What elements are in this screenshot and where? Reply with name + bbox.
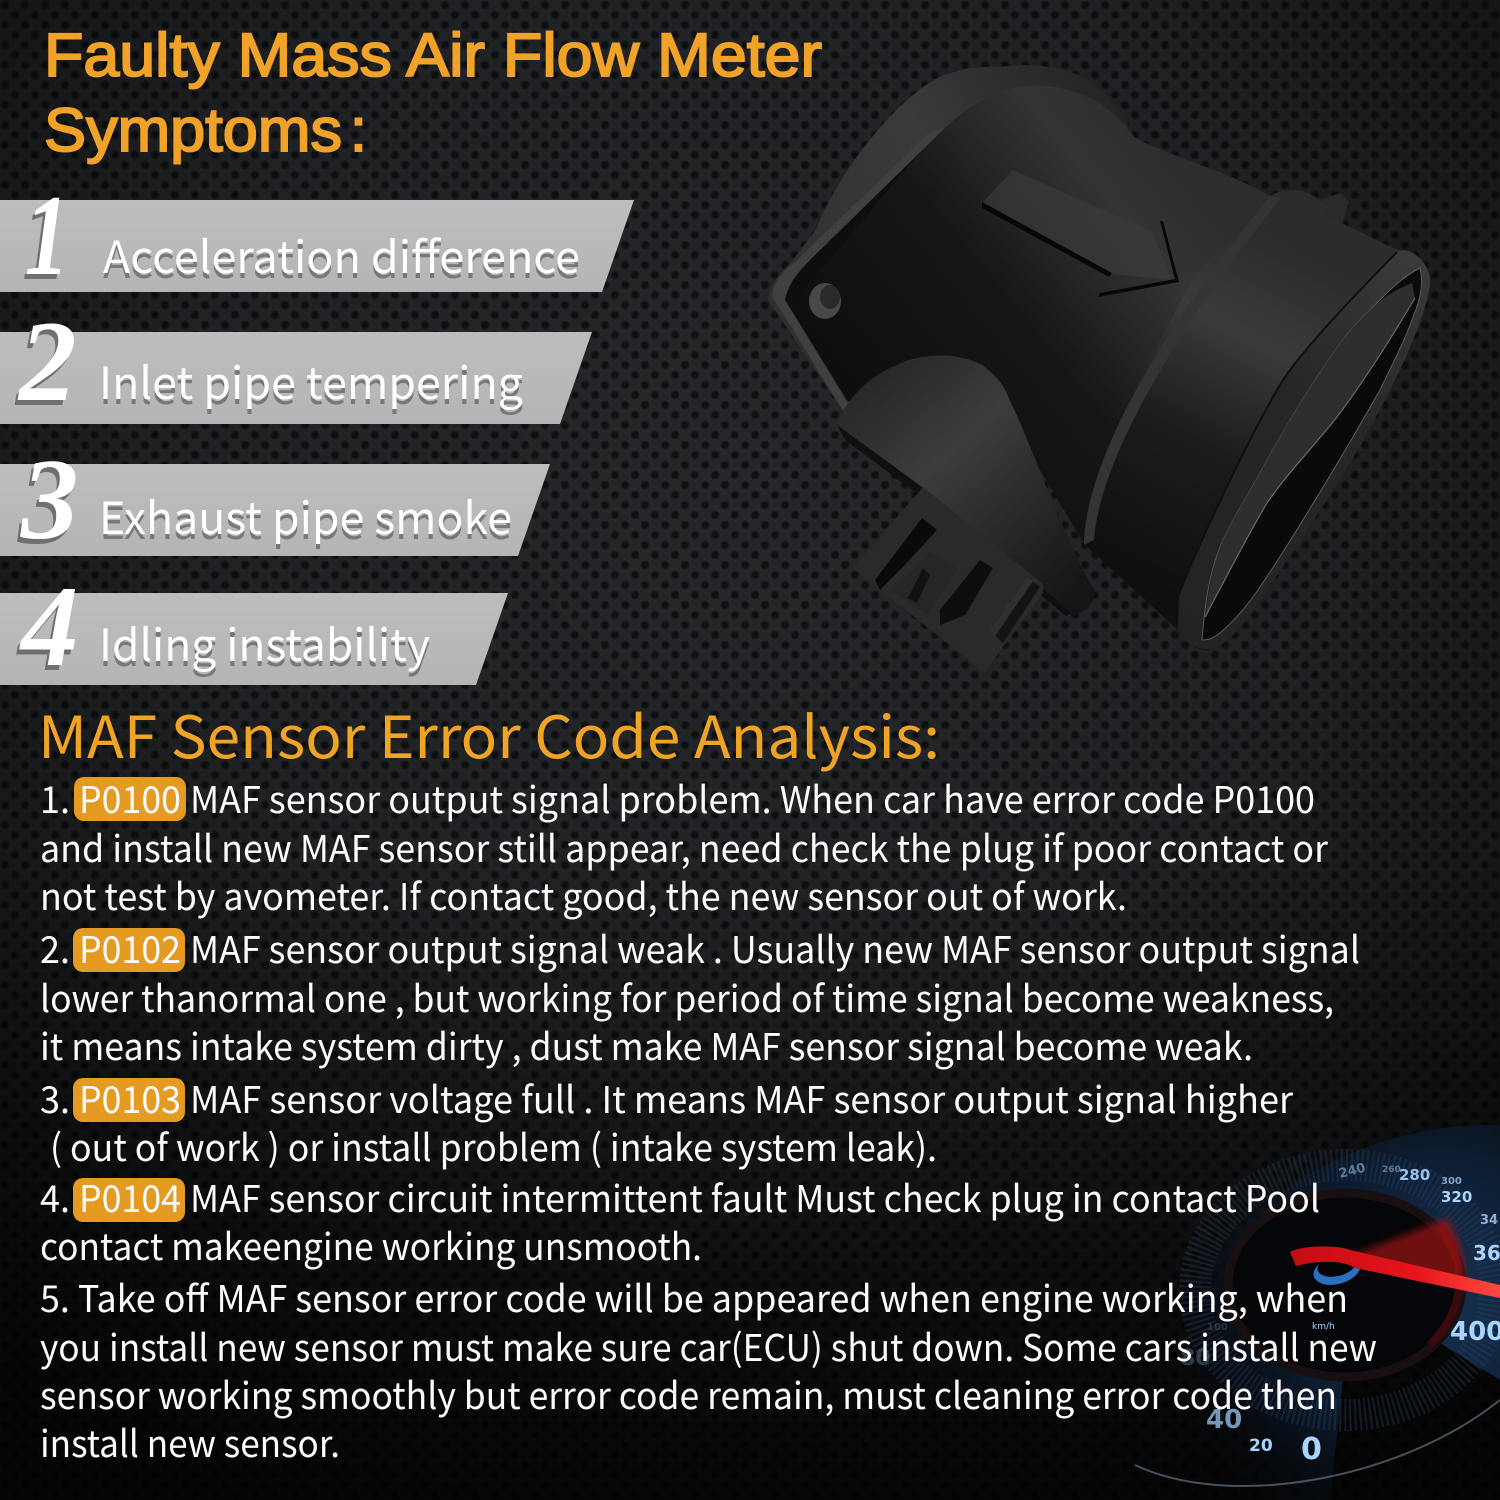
title: :: [350, 96, 367, 164]
badge P0102: P0102: [79, 920, 181, 974]
back disc and flange: [768, 65, 1200, 500]
code 3: P0103: [40, 1070, 1294, 1172]
title: [44, 21, 822, 164]
ring right red: [1430, 1225, 1460, 1345]
item 5: take off note: sensor working smoothly but error code remain, must cleaning error code then: [40, 1366, 1337, 1420]
gauge numbers: 300: [1441, 1176, 1462, 1187]
gauge numbers: 20: [1249, 1436, 1273, 1456]
code 4: P0104: contact makeengine working unsmooth.: [40, 1217, 702, 1271]
symptom 3: exhaust pipe smoke: 3: [20, 436, 78, 563]
symptom 4: idling instability: 4: [19, 563, 78, 690]
heading: error code analysis: MAF Sensor Error Code Analysis:: [38, 691, 940, 775]
code 2: P0102: [40, 920, 1360, 1071]
badge P0104: P0104: [79, 1169, 181, 1223]
badge P0100: P0100: [79, 770, 181, 824]
symptom 1: acceleration difference: 1: [25, 172, 69, 299]
gauge numbers: 240: [1337, 1161, 1367, 1182]
gauge numbers: 80: [1180, 1346, 1211, 1371]
flow direction arrow: [982, 202, 1179, 297]
title: Symptoms: [44, 96, 342, 164]
symptom 1: acceleration difference: 1: [22, 177, 66, 304]
code 1: P0100: 1.: [40, 770, 70, 824]
rim tab: [1321, 193, 1349, 224]
symptom 2: inlet pipe tempering: 2: [17, 298, 76, 425]
gauge numbers: 280: [1399, 1166, 1430, 1184]
main large body with rim silhouette: [1085, 190, 1430, 650]
gauge numbers: 320: [1441, 1188, 1472, 1206]
symptom 1: acceleration difference: Acceleration difference: [103, 222, 580, 286]
code 2: P0102: lower thanormal one , but working for period of time signal become weakness,: [40, 969, 1334, 1023]
open end rim band: [1177, 250, 1430, 649]
code 4: P0104: MAF sensor circuit intermittent fault Must check plug in contact Pool: [190, 1169, 1320, 1223]
code 4: P0104: 4.: [40, 1169, 70, 1223]
gauge numbers: km/h: [1312, 1322, 1335, 1332]
symptom 3: exhaust pipe smoke: Exhaust pipe smoke: [99, 488, 512, 552]
item 5: take off note: 5. Take off MAF sensor error code will be appeared when engine working, when: [40, 1269, 1348, 1323]
symptom 2: inlet pipe tempering: Inlet pipe tempering: [99, 353, 523, 417]
connector lip: [837, 425, 1072, 616]
flange highlight band: [772, 128, 945, 412]
needle: [1290, 1246, 1500, 1298]
symptom 4: idling instability: 4: [16, 568, 76, 695]
symptom 2: inlet pipe tempering: Inlet pipe tempering: [99, 348, 523, 412]
gauge numbers: 40: [1206, 1405, 1242, 1435]
code 1: P0100: MAF sensor output signal problem. When car have error code P0100: [190, 770, 1315, 824]
symptom 1: acceleration difference: [0, 172, 634, 304]
badge P0103: P0103: [79, 1070, 181, 1124]
outer rim line: [1135, 1400, 1500, 1486]
symptom 4: idling instability: Idling instability: [99, 610, 430, 674]
rim seam line: [1177, 252, 1397, 627]
error code text block: [40, 770, 1377, 1468]
code 2: P0102: MAF sensor output signal weak . Usually new MAF sensor output signal: [190, 920, 1360, 974]
mounting hole: [809, 283, 841, 319]
symptom 3: exhaust pipe smoke: [0, 436, 550, 568]
inner band edge line: [1205, 298, 1415, 617]
symptom 3: exhaust pipe smoke: Exhaust pipe smoke: [99, 483, 512, 547]
gauge numbers: 100: [1207, 1322, 1228, 1333]
item 5: take off note: [40, 1269, 1377, 1468]
open end hole: [1202, 268, 1422, 640]
code 3: P0103: MAF sensor voltage full . It means MAF sensor output signal higher: [190, 1070, 1294, 1124]
symptom 4: idling instability: Idling instability: [99, 615, 430, 679]
gauge numbers: [1180, 1161, 1500, 1467]
code 4: P0104: [40, 1169, 1320, 1271]
item 5: take off note: install new sensor.: [40, 1414, 340, 1468]
item 5: take off note: you install new sensor must make sure car(ECU) shut down. Some cars install new: [40, 1318, 1377, 1372]
symptom 3: exhaust pipe smoke: 3: [17, 441, 76, 568]
dial glow: [1140, 1125, 1500, 1500]
raised highlight patch: [982, 170, 1172, 280]
connector housing: [837, 356, 1094, 614]
code 1: P0100: and install new MAF sensor still appear, need check the plug if poor contact or: [40, 819, 1329, 873]
code 2: P0102: it means intake system dirty , dust make MAF sensor signal become weak.: [40, 1017, 1253, 1071]
symptom 1: acceleration difference: Acceleration difference: [103, 227, 580, 291]
collar ring: [1084, 196, 1280, 545]
code 3: P0103: ( out of work ) or install problem ( intake system leak).: [50, 1118, 937, 1172]
gauge numbers: 0: [1301, 1432, 1322, 1467]
gauge numbers: 260: [1382, 1165, 1401, 1175]
tick band: [1195, 1165, 1495, 1415]
code 3: P0103: 3.: [40, 1070, 70, 1124]
code 2: P0102: 2.: [40, 920, 70, 974]
symptom 4: idling instability: [0, 563, 508, 695]
hub: [1310, 1250, 1364, 1290]
inner ring: [1228, 1193, 1462, 1377]
product: MAF sensor: [768, 65, 1430, 673]
connector plug: [853, 487, 1043, 673]
symptom 2: inlet pipe tempering: 2: [14, 303, 74, 430]
speedometer gauge: [1135, 1125, 1500, 1500]
panel: symptom list: [0, 172, 634, 695]
inner textured band: [1205, 283, 1415, 617]
symptom 2: inlet pipe tempering: [0, 298, 592, 430]
gauge numbers: 34: [1480, 1213, 1498, 1228]
neck and middle body: [790, 86, 1290, 545]
code 1: P0100: not test by avometer. If contact good, the new sensor out of work.: [40, 867, 1127, 921]
red sweep: [1345, 1218, 1463, 1285]
code 1: P0100: [40, 770, 1329, 921]
flange face: [785, 130, 1000, 440]
title: Faulty Mass Air Flow Meter: [44, 21, 822, 89]
